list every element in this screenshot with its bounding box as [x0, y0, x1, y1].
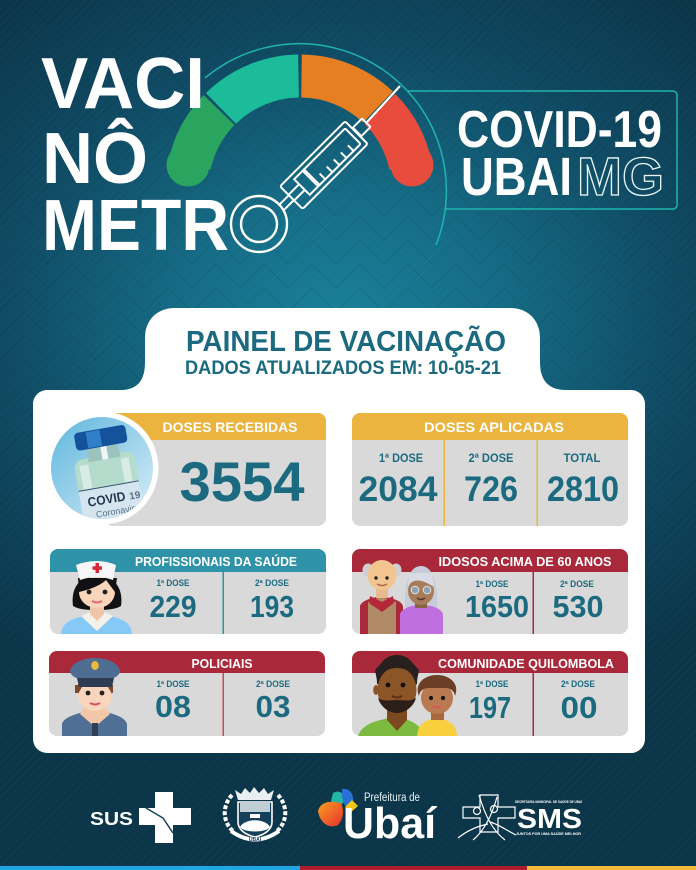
logo: municipal crest [225, 787, 285, 843]
panel: doses aplicadas: 2084 [358, 470, 438, 509]
panel: doses aplicadas: 2ª DOSE [468, 451, 514, 465]
logo: Prefeitura de Ubaí [318, 789, 438, 848]
logo: Prefeitura de Ubaí: Ubaí [343, 799, 438, 848]
logo: SMS: SMS [517, 803, 582, 834]
logo: SMS: JUNTOS POR UMA SAÚDE MELHOR [516, 831, 581, 836]
icon: elderly couple [360, 560, 443, 634]
logo: SMS: SECRETARIA MUNICIPAL DE SAÚDE DE UBAÍ [515, 799, 583, 804]
panel: comunidade quilombola: 197 [469, 690, 511, 725]
heading: COVID-19 Ubaí MG: COVID-19 [457, 101, 662, 159]
panel: profissionais da saúde: PROFISSIONAIS DA SAÚDE [135, 554, 297, 569]
heading: COVID-19 Ubaí MG: MG [577, 147, 664, 207]
title: Vacinômetro: NÔ [42, 118, 148, 199]
panel: profissionais da saúde: 229 [150, 589, 196, 624]
panel: profissionais da saúde: 1ª DOSE [156, 578, 190, 588]
panel: comunidade quilombola: 1ª DOSE [476, 679, 508, 689]
title: Vacinômetro: VACI [41, 44, 205, 124]
panel: white dashboard [33, 308, 645, 753]
panel: policiais: 08 [155, 689, 191, 724]
panel: doses aplicadas: TOTAL [564, 451, 600, 465]
panel: doses aplicadas: 2810 [547, 470, 619, 509]
icon: police officer [62, 658, 127, 736]
logo: Prefeitura de Ubaí: Prefeitura de [364, 792, 420, 804]
panel: idosos acima de 60 anos: 1650 [465, 589, 529, 624]
heading: COVID-19 Ubaí MG: UBAI [461, 147, 572, 207]
logo: SUS: SUS [90, 809, 133, 829]
panel: policiais: 03 [256, 689, 290, 724]
panel: doses recebidas [51, 413, 326, 526]
heading: painel de vacinação: PAINEL DE VACINAÇÃO [186, 324, 506, 358]
panel: idosos acima de 60 anos [352, 549, 628, 634]
panel: idosos acima de 60 anos: 530 [552, 589, 604, 624]
title: Vacinômetro [41, 44, 229, 266]
title: Vacinômetro: METR [42, 186, 229, 266]
panel: comunidade quilombola: 2ª DOSE [561, 679, 595, 689]
gauge outer arc and COVID frame [205, 44, 677, 245]
logo: SUS [90, 792, 191, 843]
icon: vaccine vial: 19 [129, 490, 142, 503]
panel: policiais [49, 651, 325, 736]
panel: doses recebidas: DOSES RECEBIDAS [162, 419, 298, 435]
icon: nurse [61, 561, 132, 634]
panel: policiais: 1ª DOSE [156, 679, 190, 689]
panel: idosos acima de 60 anos: IDOSOS ACIMA DE 60 ANOS [438, 554, 612, 569]
panel: doses aplicadas: 726 [464, 470, 518, 509]
icon: vaccine vial: COVID [86, 489, 126, 510]
logo: SMS [458, 795, 583, 840]
icon: vaccine vial: Coronavirus [95, 501, 145, 520]
panel: policiais: POLICIAIS [192, 656, 253, 671]
panel: idosos acima de 60 anos: 1ª DOSE [476, 579, 508, 589]
panel: doses aplicadas [352, 413, 628, 526]
panel: comunidade quilombola [352, 651, 628, 736]
panel: profissionais da saúde: 2ª DOSE [255, 578, 289, 588]
panel: profissionais da saúde [50, 549, 326, 634]
logo: municipal crest: UBAÍ [249, 835, 262, 843]
heading: painel de vacinação [185, 324, 506, 379]
gauge [166, 76, 434, 186]
panel: policiais: 2ª DOSE [256, 679, 290, 689]
bottom colour bar [0, 866, 696, 870]
heading: COVID-19 Ubaí MG [457, 101, 664, 207]
panel: comunidade quilombola: 00 [560, 690, 598, 725]
icon: vaccine vial [51, 413, 158, 524]
panel: doses aplicadas: 1ª DOSE [379, 451, 423, 465]
icon: man and child [358, 655, 457, 736]
panel: idosos acima de 60 anos: 2ª DOSE [560, 579, 594, 589]
panel: comunidade quilombola: COMUNIDADE QUILOMBOLA [438, 656, 615, 671]
icon: syringe [231, 86, 400, 252]
panel: profissionais da saúde: 193 [250, 589, 294, 624]
panel: doses aplicadas: DOSES APLICADAS [424, 419, 564, 435]
panel: doses recebidas: 3554 [180, 450, 304, 513]
heading: painel de vacinação: DADOS ATUALIZADOS EM: 10-05-21 [185, 358, 501, 379]
